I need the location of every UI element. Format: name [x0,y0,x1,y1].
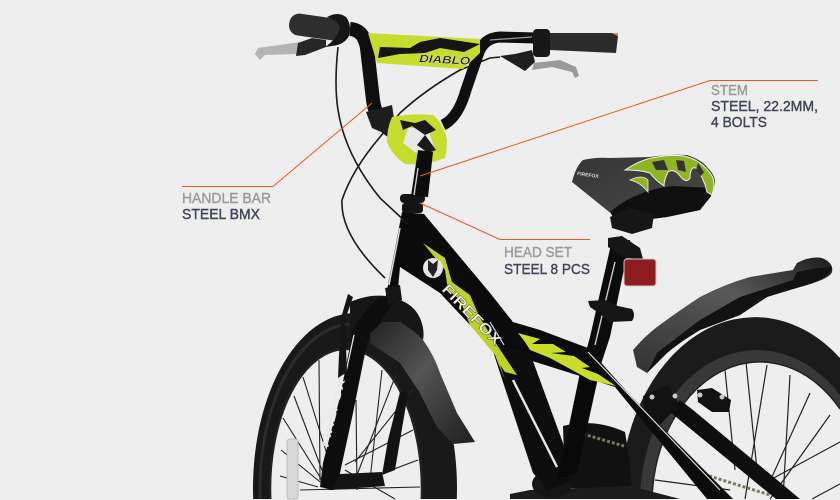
leader lines [182,80,818,240]
frame [385,212,733,499]
fork label: FIREFOX [320,378,347,448]
label: handle bar [182,190,271,223]
red reflector [624,259,656,286]
headset [400,194,425,213]
left grip collar [325,14,350,47]
stem pad marks [400,120,436,153]
cables [336,47,500,278]
saddle logo: FIREFOX [577,171,600,180]
front mudguard [370,322,475,444]
left brake mount [296,38,326,56]
dropout bolts [650,392,724,400]
label: head set [504,244,590,278]
seat post highlight [595,262,615,345]
top tube flames [518,333,616,386]
label: head set: HEAD SET [504,244,572,261]
rear fork leg [382,392,408,475]
label: stem: 4 BOLTS [711,114,767,131]
saddle flames [625,155,714,195]
right grip [550,33,618,53]
label: handle bar: HANDLE BAR [182,190,271,207]
frame flames [423,243,517,380]
label: stem: STEEL, 22.2MM, [711,98,818,115]
handlebar pad [368,33,480,69]
rear mudguard [633,258,832,373]
bicycle [253,12,840,499]
saddle rails [610,208,654,234]
fork highlight [346,335,354,372]
crank [532,470,572,498]
handlebar [255,12,618,164]
chain [583,434,770,495]
rear mudguard underside [647,267,832,373]
frame logo badge [423,258,443,278]
front wheel [253,313,457,499]
right grip collar [533,29,550,57]
dropout bracket [643,385,678,425]
chainring [510,486,680,499]
rear wheel [620,317,840,499]
stem pad centre [403,128,434,153]
fork crown [385,285,402,305]
handlebar clamp plate [366,105,394,135]
label: stem [711,82,818,131]
saddle underside [610,186,714,220]
fork [320,297,397,490]
frame logo mark [428,260,438,277]
saddle flame lower [630,177,648,192]
pad flames [378,38,480,58]
frame label: FIREFOX [438,281,505,349]
label: handle bar: STEEL BMX [182,206,260,223]
head tube and top tube [385,212,733,499]
steerer highlight [414,168,418,195]
pad label: DIABLO [419,53,471,68]
front hub [320,472,385,490]
pedal reflector [287,439,298,499]
right brake mount [500,50,535,71]
seat tube lower [558,373,598,478]
chain stay [670,400,800,499]
stem pad [387,114,447,164]
grip end [612,33,618,36]
brake bracket [697,388,731,412]
down tube [490,342,572,490]
left grip [288,12,344,42]
steerer column [411,150,433,197]
label: stem: STEM [711,82,748,99]
saddle [572,155,715,234]
head tube highlight [389,228,400,285]
saddle dark spots [652,160,704,176]
label: head set: STEEL 8 PCS [504,261,590,278]
front brake [338,294,353,378]
stay highlight [490,322,720,490]
seat post clamp [588,300,634,322]
seat post [560,240,630,473]
front mudguard back [350,296,424,340]
chain guard [563,423,632,490]
right brake lever [532,60,579,78]
left brake lever [255,42,306,60]
down tube highlight [513,380,557,467]
rear reflector bracket [608,236,643,259]
